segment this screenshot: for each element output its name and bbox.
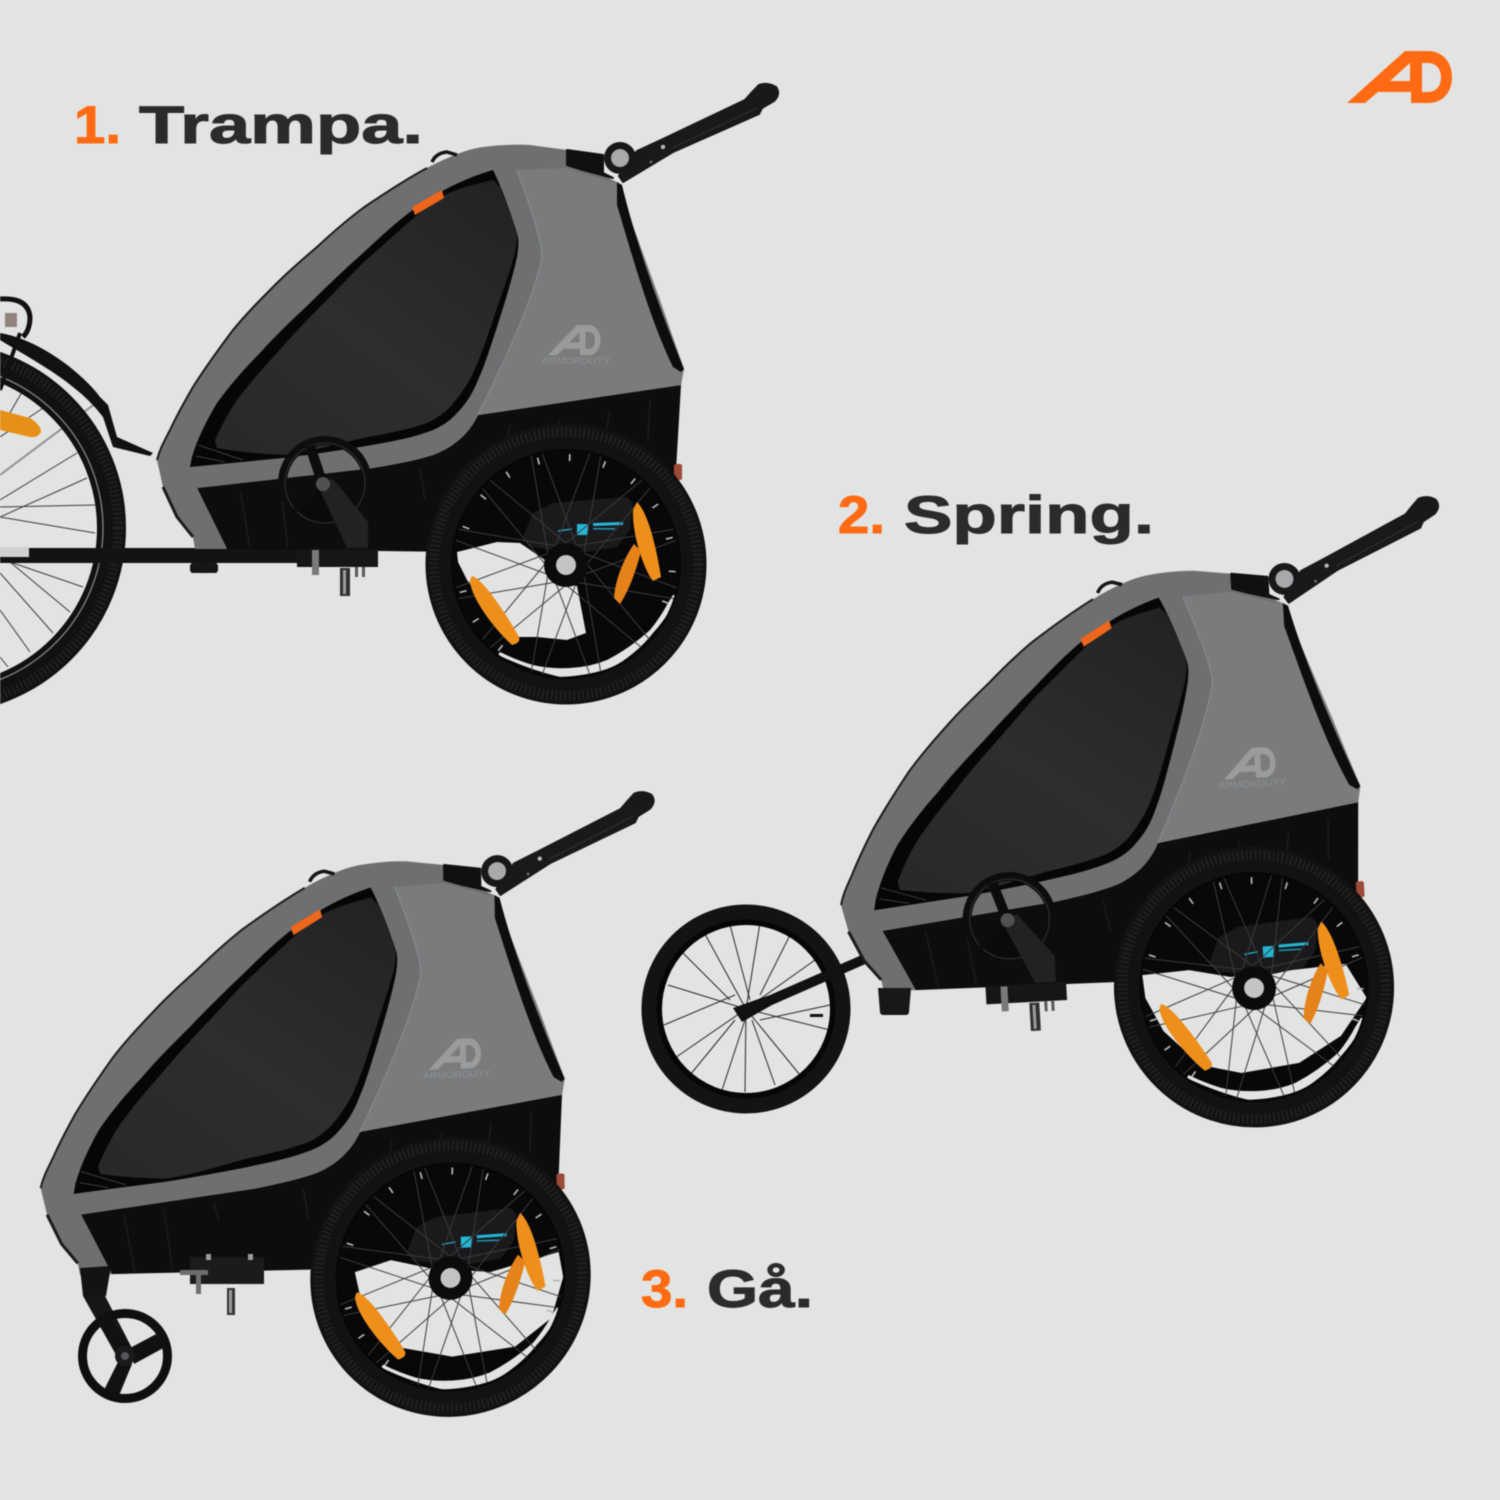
logo: AD mark xyxy=(1347,51,1452,103)
tow bar xyxy=(0,547,298,573)
canopy brand text: ARMORDUTY xyxy=(542,356,610,366)
push handle xyxy=(443,792,655,897)
wheel interior xyxy=(335,1163,566,1391)
wheel hub xyxy=(544,543,588,587)
trailer 2 front foot xyxy=(878,988,911,1015)
hub housing xyxy=(523,497,633,553)
wheel interior xyxy=(452,450,680,678)
pedal wheel xyxy=(965,874,1056,986)
wheel reflectors xyxy=(354,1212,547,1361)
bicycle rear wheel and fender xyxy=(0,299,153,706)
canopy brand text: ARMORDUTY xyxy=(423,1068,491,1081)
push handle xyxy=(567,84,778,182)
wheel interior xyxy=(1140,873,1368,1101)
heading: 1. Trampa.: Trampa. xyxy=(139,96,423,155)
canopy logo xyxy=(428,1038,481,1070)
wheel hub xyxy=(1231,965,1277,1011)
heading: 2. Spring.: 2. xyxy=(838,486,885,545)
wheel hub xyxy=(428,1255,473,1301)
heading: 2. Spring. xyxy=(838,486,1154,545)
pedal wheel xyxy=(282,440,368,548)
wheel reflectors xyxy=(470,502,661,645)
heading: 3. Gå.: 3. xyxy=(641,1260,688,1319)
heading: 1. Trampa. xyxy=(74,96,423,155)
rear wheel xyxy=(1115,848,1393,1126)
trailer 3 front caster wheel xyxy=(80,1266,168,1398)
rear wheel xyxy=(316,1141,585,1413)
canopy and body xyxy=(157,145,684,552)
canopy logo xyxy=(548,325,600,355)
push handle xyxy=(1227,497,1443,606)
canopy brand text: ARMORDUTY xyxy=(1218,777,1286,791)
canopy and body xyxy=(35,856,568,1280)
heading: 3. Gå.: Gå. xyxy=(707,1260,813,1319)
canopy and body xyxy=(823,562,1371,997)
heading: 2. Spring.: Spring. xyxy=(904,486,1154,545)
hitch xyxy=(985,982,1069,1033)
canopy logo xyxy=(1222,747,1276,780)
wheel reflectors xyxy=(1155,920,1353,1073)
hub housing xyxy=(406,1208,517,1268)
trailer 2: jogging mode xyxy=(819,497,1473,1141)
trailer 3 hitch bracket xyxy=(180,1254,264,1315)
trailer 1: bike mode xyxy=(0,84,778,696)
jogging front wheel xyxy=(649,912,870,1106)
trailer 3: walking mode xyxy=(34,792,664,1423)
hub housing xyxy=(1207,917,1320,978)
heading: 1. Trampa.: 1. xyxy=(74,96,121,155)
heading: 3. Gå. xyxy=(641,1260,813,1319)
rear wheel xyxy=(434,432,698,696)
hitch xyxy=(297,549,378,596)
